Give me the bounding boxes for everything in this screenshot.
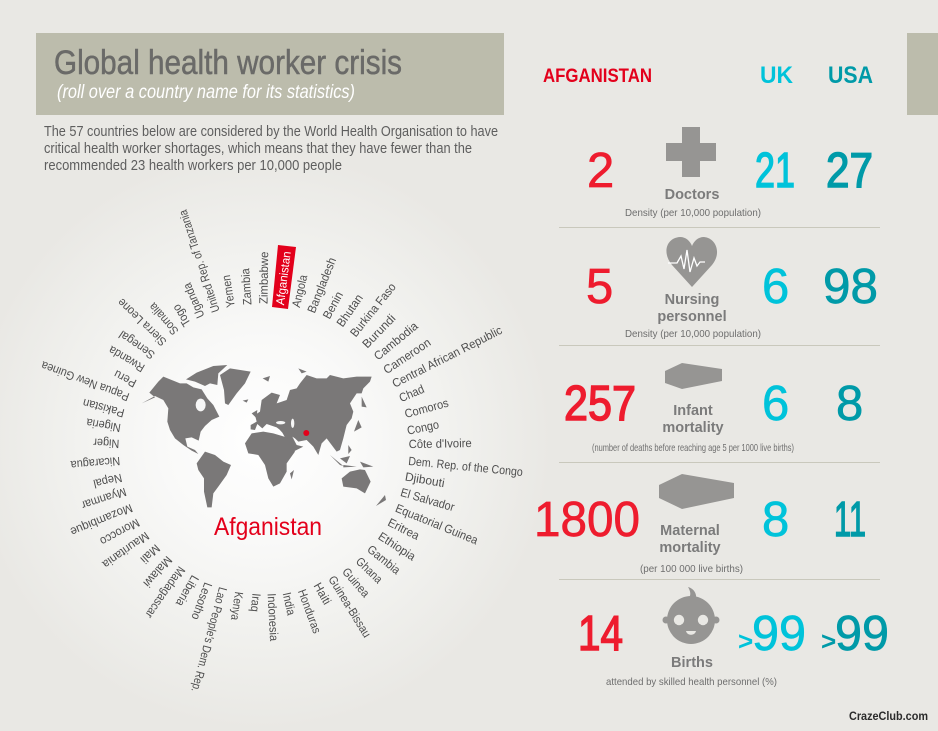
intro paragraph — [44, 123, 498, 174]
country name ring: El Salvador — [399, 485, 456, 514]
row: births: Births — [671, 655, 713, 671]
country name ring: Honduras — [295, 587, 324, 635]
country name ring: Bhutan — [334, 292, 366, 330]
row: doctors: Doctors — [665, 187, 719, 203]
country name ring: Ethiopia — [376, 529, 419, 564]
country name ring: Morocco — [97, 516, 142, 549]
intro paragraph: critical health worker shortages, which means that they have fewer than the — [44, 140, 472, 157]
country name ring: Djibouti — [404, 470, 446, 490]
row: births — [578, 587, 889, 688]
country name ring: India — [280, 591, 298, 617]
country name ring: Zambia — [238, 268, 254, 305]
country name ring: Haiti — [311, 580, 334, 607]
row: nursing personnel: Density (per 10,000 population) — [625, 328, 761, 340]
country name ring: Dem. Rep. of the Congo — [408, 454, 524, 479]
row: nursing personnel: personnel — [657, 309, 727, 325]
row: doctors: 21 — [755, 144, 795, 198]
icon: medical cross — [666, 127, 716, 177]
country name ring: Yemen — [219, 274, 238, 308]
row: infant mortality: 6 — [762, 377, 789, 431]
row: births: 99 — [835, 607, 889, 661]
row: nursing personnel: 5 — [586, 260, 613, 314]
country name ring: Bangladesh — [304, 255, 339, 315]
row: maternal mortality: 11 — [834, 493, 866, 547]
country name ring: Peru — [111, 367, 139, 390]
country name ring: Nigeria — [85, 416, 122, 435]
country name ring: Benin — [320, 289, 346, 321]
country name ring: Myanmar — [80, 485, 128, 512]
country name ring: Liberia — [173, 573, 202, 609]
corner tab — [907, 33, 938, 115]
country name ring: Equatorial Guinea — [393, 501, 480, 548]
row: births: attended by skilled health personnel (%) — [606, 676, 777, 688]
column headings: UK — [760, 62, 794, 89]
row: births: 14 — [578, 607, 623, 661]
row: nursing personnel — [586, 237, 878, 340]
row: doctors: 2 — [587, 144, 614, 198]
country name ring: Lesotho — [188, 581, 215, 622]
country name ring: Pakistan — [81, 396, 126, 420]
row: infant mortality: 257 — [564, 377, 636, 431]
row: maternal mortality: Maternal — [660, 523, 720, 539]
country name ring: Angola — [289, 273, 310, 309]
icon: heart with heartbeat — [666, 237, 717, 287]
row: doctors: Density (per 10,000 population) — [625, 207, 761, 219]
country name ring: Eritrea — [386, 515, 422, 543]
row: births: > — [738, 626, 753, 656]
country name ring: Central African Republic — [390, 323, 504, 391]
row: births: > — [821, 626, 836, 656]
row: infant mortality: 8 — [836, 377, 863, 431]
row: maternal mortality: mortality — [659, 540, 721, 556]
selected country highlight: Afganistan — [273, 251, 294, 306]
selected country name: Afganistan — [214, 513, 322, 541]
country name ring — [39, 208, 524, 694]
country name ring: Sierra Leone — [114, 295, 169, 349]
credit: CrazeClub.com — [849, 711, 928, 723]
country name ring: Togo — [169, 302, 194, 329]
country name ring: Ghana — [353, 554, 386, 586]
country name ring: Mauritania — [100, 529, 152, 572]
intro paragraph: recommended 23 health workers per 10,000 people — [44, 157, 342, 174]
row: nursing personnel: 6 — [762, 260, 789, 314]
map marker: Afghanistan — [303, 430, 309, 436]
country name ring: Zimbabwe — [256, 251, 271, 304]
country name ring: Gambia — [364, 542, 403, 577]
country name ring: Cambodia — [371, 319, 421, 363]
column headings — [543, 62, 873, 89]
icon: baby face — [662, 587, 720, 644]
country name ring: Comoros — [403, 396, 450, 421]
country name ring: Indonesia — [265, 593, 281, 642]
icon: small coffin — [665, 363, 722, 389]
country name ring: Uganda — [180, 281, 207, 320]
country name ring: Niger — [93, 435, 120, 451]
country name ring: Papua New Guinea — [39, 358, 131, 404]
row: maternal mortality: 8 — [762, 493, 789, 547]
column headings: USA — [828, 62, 873, 89]
row: infant mortality — [564, 363, 863, 454]
country name ring: Chad — [397, 382, 426, 405]
country name ring: Burundi — [359, 311, 398, 351]
intro paragraph: The 57 countries below are considered by the World Health Organisation to have — [44, 123, 498, 140]
country name ring: Nicaragua — [70, 454, 121, 472]
country name ring: Mozambique — [68, 501, 135, 539]
row: births: 99 — [752, 607, 806, 661]
country name ring: Somalia — [146, 300, 181, 338]
country name ring: Senegal — [116, 328, 158, 362]
icon: large coffin — [659, 474, 734, 509]
country name ring: Guinea-Bissau — [325, 573, 374, 640]
country name ring: Côte d'Ivoire — [409, 436, 472, 451]
country name ring: Mali — [138, 541, 163, 566]
world map — [142, 365, 386, 507]
title banner — [36, 33, 504, 115]
row: doctors — [587, 127, 873, 219]
country name ring: Kenya — [228, 591, 246, 621]
country name ring: Burkina Faso — [347, 280, 399, 340]
subtitle: (roll over a country name for its statistics) — [57, 82, 355, 103]
country name ring: Cameroon — [381, 335, 433, 377]
country name ring: Rwanda — [106, 343, 147, 375]
country name ring: United Rep. of Tanzania — [176, 208, 223, 314]
country name ring: Nepal — [92, 471, 123, 491]
row: infant mortality: mortality — [662, 420, 724, 436]
title: Global health worker crisis — [54, 44, 402, 82]
country name ring: Malawi — [140, 553, 175, 590]
row: maternal mortality: (per 100 000 live births) — [640, 563, 743, 575]
row: nursing personnel: Nursing — [665, 292, 719, 308]
country name ring: Iraq — [248, 593, 263, 612]
row: doctors: 27 — [826, 144, 873, 198]
country name ring: Madagascar — [142, 564, 188, 621]
column headings: AFGANISTAN — [543, 66, 652, 87]
row: nursing personnel: 98 — [823, 260, 878, 314]
row: maternal mortality: 1800 — [534, 493, 640, 547]
country name ring: Lao People's Dem. Rep. — [188, 586, 230, 694]
country name ring: Guinea — [339, 565, 373, 600]
row: maternal mortality — [534, 474, 866, 575]
country name ring: Congo — [406, 417, 441, 438]
row: infant mortality: (number of deaths before reaching age 5 per 1000 live births) — [592, 442, 794, 454]
row: infant mortality: Infant — [673, 403, 713, 419]
